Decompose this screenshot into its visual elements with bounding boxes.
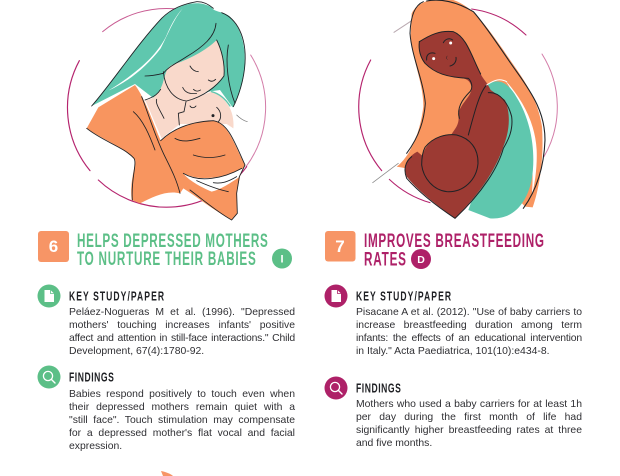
teal garment xyxy=(468,81,533,218)
text: key study left: Peláez-Nogueras M et al. (1996). "Depressed xyxy=(69,307,295,318)
text: findings left xyxy=(69,389,296,452)
line work: nursing mother xyxy=(405,0,545,218)
label: findings right: FINDINGS xyxy=(356,382,401,396)
label: key study right: KEY STUDY/PAPER xyxy=(356,290,451,304)
number badge 6: 6 xyxy=(49,237,58,256)
ring around nursing mother xyxy=(359,9,557,203)
heading: helps depressed mothers xyxy=(77,230,268,270)
text: findings left: for a depressed mother's flat vocal and facial xyxy=(69,428,295,439)
text: key study right xyxy=(356,307,582,357)
label: key study left: KEY STUDY/PAPER xyxy=(69,290,164,304)
text: findings right: significantly higher breastfeeding rates at three xyxy=(356,425,582,436)
text: key study right: Pisacane A et al. (2012). "Use of baby carriers to xyxy=(356,307,582,318)
text: key study left: mothers' touching increases infants' positive xyxy=(69,320,295,331)
long orange hair xyxy=(397,0,543,207)
text: findings left: expression. xyxy=(69,441,122,452)
mother hair xyxy=(92,3,245,107)
text: key study left xyxy=(69,307,295,357)
text: key study right: in Italy." Acta Paediatrica, 101(10):e434-8. xyxy=(356,346,550,357)
line work: mother xyxy=(87,2,247,220)
illustration: mother with baby in orange wrap xyxy=(67,2,266,220)
icon: document, magenta xyxy=(324,284,348,308)
heading: helps depressed mothers: HELPS DEPRESSED MOTHERS xyxy=(77,230,268,252)
number badge 6 xyxy=(38,231,69,262)
heading: improves breastfeeding rates: IMPROVES BREASTFEEDING xyxy=(364,230,544,252)
mother face and chest xyxy=(163,40,224,101)
category badge I xyxy=(272,248,292,268)
ring around mother xyxy=(67,8,266,207)
icon: document, green xyxy=(38,284,60,308)
text: key study right: infants: the effects of an educational intervention xyxy=(356,333,582,344)
icon: magnifier, green xyxy=(38,366,60,388)
text: findings left: Babies respond positively to touch even when xyxy=(69,389,295,400)
text: findings left: "still face". Touch stimulation may compensate xyxy=(69,415,295,426)
illustration: mother breastfeeding xyxy=(359,0,557,218)
text: findings right: per day during the first month of life had xyxy=(356,412,582,423)
text: findings right xyxy=(356,399,582,449)
white gap beside hair xyxy=(505,80,537,197)
brown skin: face, neck and arm xyxy=(405,31,509,218)
number badge 7 xyxy=(325,231,356,262)
text: key study left: Development, 67(4):1780-92. xyxy=(69,346,204,357)
next illustration peeking at bottom edge xyxy=(161,471,173,476)
baby ear xyxy=(211,114,214,117)
eyes xyxy=(432,57,435,60)
text: findings right: Mothers who used a baby carriers for at least 1h xyxy=(356,399,582,410)
number badge 7: 7 xyxy=(335,237,345,256)
orange wrap xyxy=(87,85,245,220)
heading: improves breastfeeding rates: RATES xyxy=(364,249,406,270)
text: findings right: and five months. xyxy=(356,438,432,449)
icon: magnifier, magenta xyxy=(324,376,348,400)
text: findings left: their depressed mothers remain quiet with a xyxy=(69,402,295,413)
heading: improves breastfeeding rates xyxy=(364,230,544,270)
text: key study left: affect and attention in still-face interactions." Child xyxy=(69,333,295,344)
heading: helps depressed mothers: TO NURTURE THEIR BABIES xyxy=(77,248,256,270)
text: key study right: increase breastfeeding duration among term xyxy=(356,320,582,331)
category badge D: D xyxy=(417,254,425,266)
baby head xyxy=(421,135,479,192)
label: findings left: FINDINGS xyxy=(69,371,114,385)
category badge D xyxy=(411,249,431,269)
category badge I: I xyxy=(280,254,284,266)
